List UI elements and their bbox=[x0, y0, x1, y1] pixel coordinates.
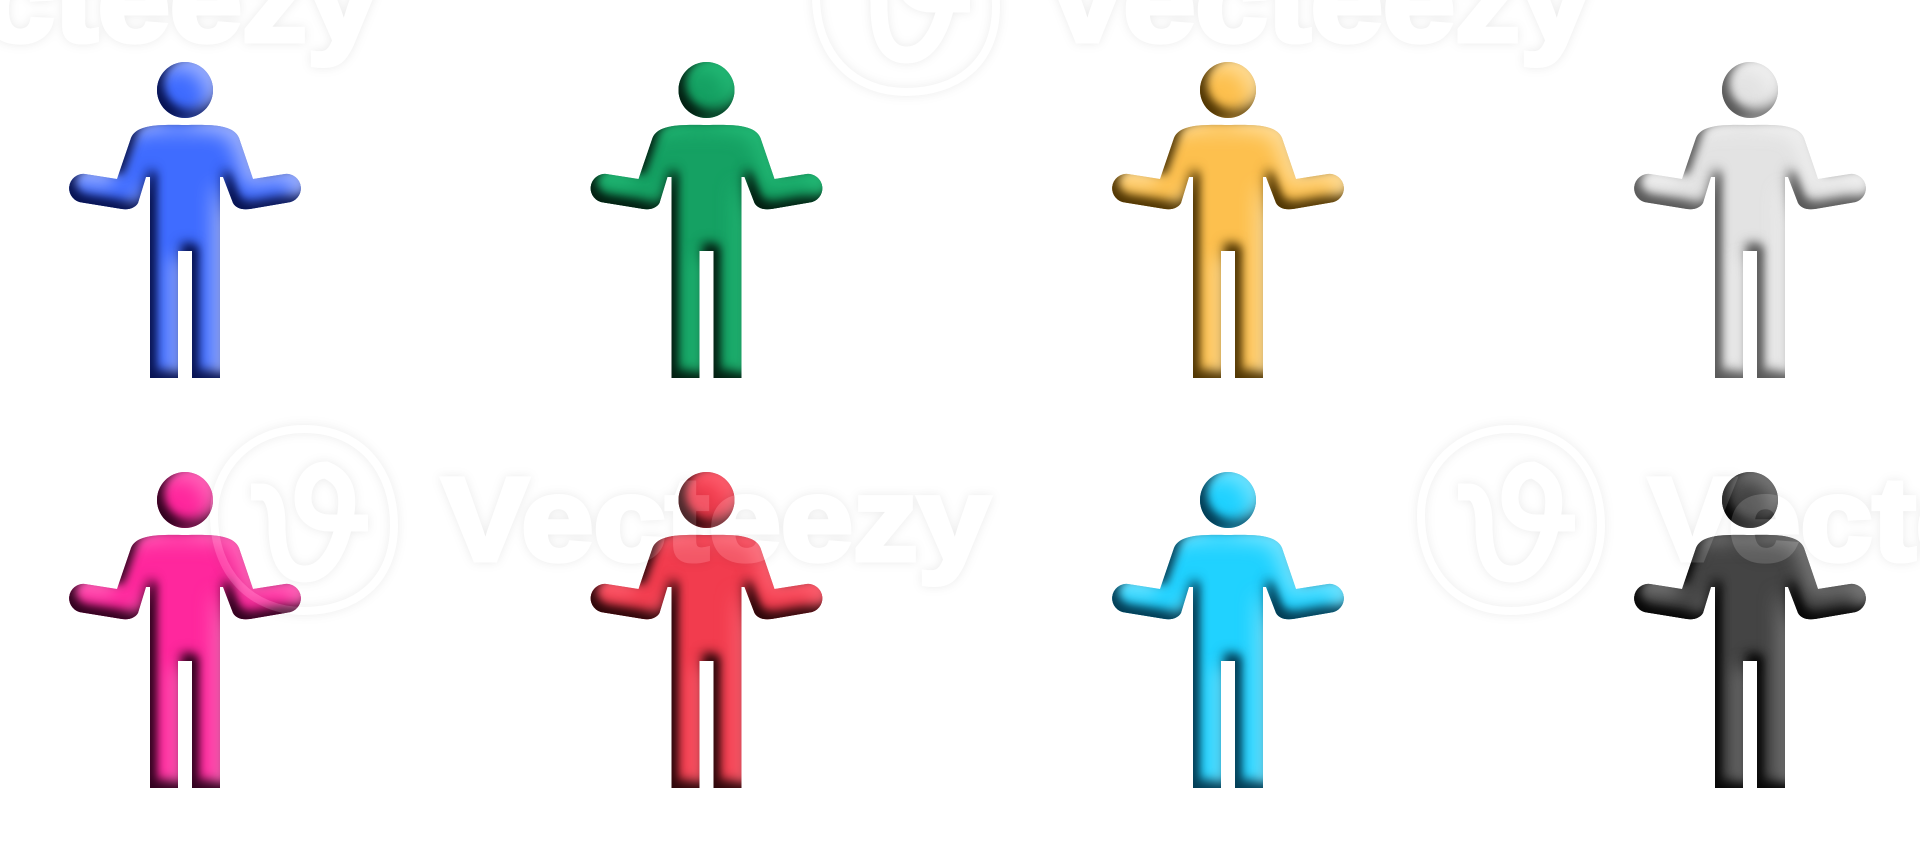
white head bbox=[1722, 62, 1778, 118]
figure: white shrugging person bbox=[1634, 62, 1866, 378]
cyan head bbox=[1200, 472, 1256, 528]
pink body bbox=[69, 535, 301, 788]
red head bbox=[678, 472, 734, 528]
figure: yellow shrugging person bbox=[1112, 62, 1344, 378]
figure: green shrugging person bbox=[591, 62, 822, 378]
yellow body bbox=[1112, 125, 1344, 378]
watermark: lower left logo and wordmark: Vecteezy bbox=[442, 454, 990, 586]
watermark: top logo and wordmark bbox=[816, 0, 1592, 92]
green body bbox=[591, 125, 822, 378]
figure: pink shrugging person bbox=[69, 472, 301, 788]
red body bbox=[591, 535, 822, 788]
figure: cyan shrugging person bbox=[1112, 472, 1344, 788]
black body bbox=[1634, 535, 1866, 788]
green head bbox=[678, 62, 734, 118]
yellow head bbox=[1200, 62, 1256, 118]
watermark: lower left logo and wordmark bbox=[214, 429, 990, 611]
black head bbox=[1722, 472, 1778, 528]
blue body bbox=[69, 125, 301, 378]
figure: red shrugging person bbox=[591, 472, 822, 788]
watermark: lower right logo and wordmark bbox=[1421, 429, 1920, 611]
figure: blue shrugging person bbox=[69, 62, 301, 378]
cyan body bbox=[1112, 535, 1344, 788]
pink head bbox=[157, 472, 213, 528]
blue head bbox=[157, 62, 213, 118]
white body bbox=[1634, 125, 1866, 378]
figure: black shrugging person bbox=[1634, 472, 1866, 788]
